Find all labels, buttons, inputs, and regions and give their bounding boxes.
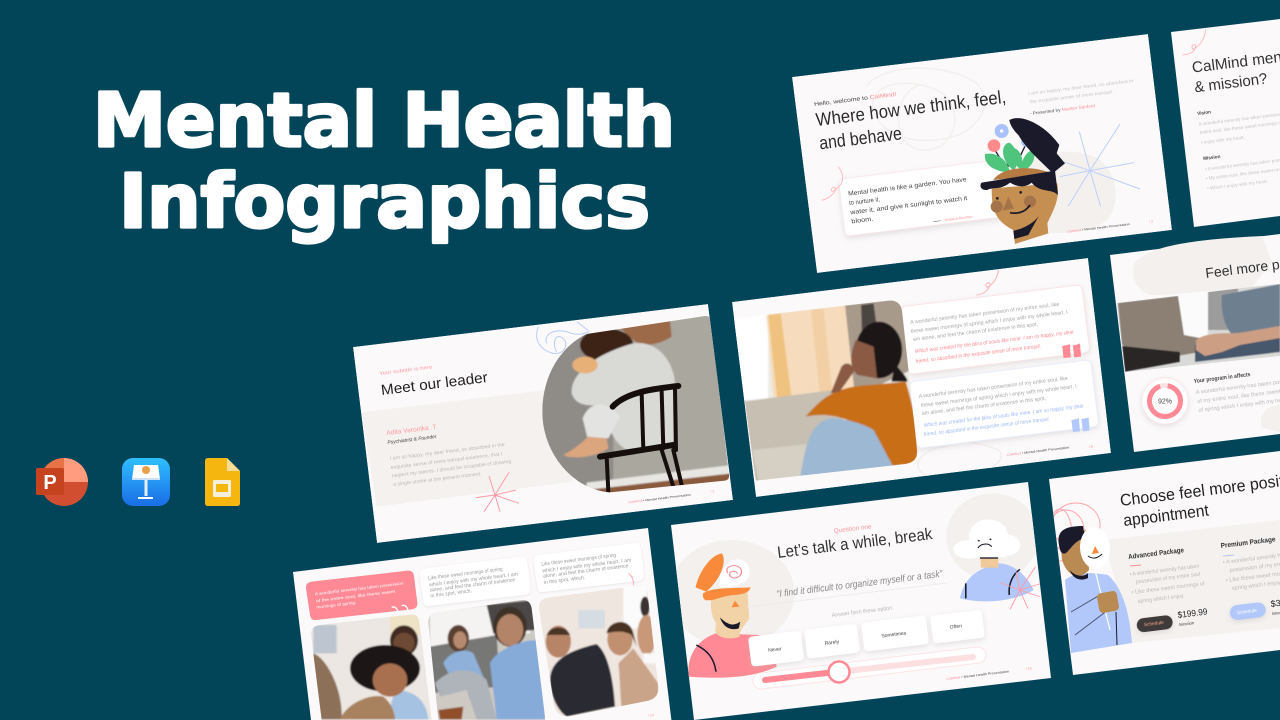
beige circle right — [946, 493, 1039, 580]
mission text — [1203, 154, 1280, 191]
bottom quote text: friend, so absorbed in the exquisite sense of mere tranquil. — [924, 417, 1050, 438]
bottom quote text: am alone, and feel the charm of existence in this spot, — [922, 396, 1047, 417]
pink star — [1000, 567, 1041, 609]
beige blob — [1133, 236, 1272, 295]
slide background — [1171, 19, 1280, 227]
decorative scribble — [867, 68, 985, 150]
leader bio: exquisite sense of mere tranquil existence, that I — [391, 451, 503, 471]
footer: CalMind • Mental Health Presentation — [1067, 222, 1130, 234]
icon: PowerPoint — [36, 458, 88, 506]
option: never: Never — [768, 646, 782, 654]
slide background — [293, 528, 671, 720]
icon: PowerPoint: P — [43, 472, 57, 494]
program heading: Your program in affects — [1194, 372, 1251, 385]
white card right — [533, 543, 644, 592]
white quote marks — [392, 605, 408, 613]
footer: CalMind • Mental Health Presentation — [628, 493, 691, 504]
vision text — [1197, 109, 1280, 145]
title: Infographics — [119, 159, 650, 245]
package: advanced: • Like these sweet mornings of — [1132, 581, 1205, 596]
slide: let's talk a while — [669, 482, 1051, 720]
quote card pink — [900, 285, 1090, 374]
photo: holding hands — [1110, 280, 1280, 380]
photo: embrace — [307, 610, 440, 720]
top quote text — [910, 302, 1074, 365]
donut chart — [1142, 378, 1188, 424]
footer: CalMind • Mental Health Presentation — [1007, 445, 1070, 457]
slide heading — [1119, 470, 1280, 530]
slide: meet our leader — [353, 304, 737, 543]
option: rarely — [804, 624, 860, 659]
quote: “I find it difficult to organize myself or a task” — [776, 569, 944, 600]
decorative scribble — [917, 442, 1002, 476]
welcome line: Hello, welcome to CalMind! — [814, 92, 897, 108]
flowers — [988, 124, 1031, 152]
slide heading — [815, 90, 1006, 150]
illustration: worried person — [688, 553, 777, 678]
slide art — [669, 493, 1041, 678]
slide background — [1110, 234, 1280, 452]
option: often — [930, 610, 985, 644]
slide contents — [306, 543, 663, 720]
pink card text — [315, 580, 405, 610]
program text — [1196, 377, 1280, 414]
slide background — [732, 258, 1111, 497]
slide: photo cards — [293, 528, 671, 720]
package: advanced: /session — [1179, 620, 1195, 627]
pink card text: A wonderful serenity has taken possession — [315, 580, 405, 596]
illustration: cloud person — [953, 519, 1034, 601]
slide heading: Meet our leader — [380, 370, 489, 399]
package: premium — [1220, 536, 1280, 621]
option prompt: Answer form these option: — [832, 605, 894, 619]
pink star — [476, 472, 519, 512]
pink curl — [976, 270, 999, 295]
pink curl — [822, 167, 843, 200]
top quote text: A wonderful serenity has taken possession of my entire soul, like — [910, 302, 1060, 326]
leaves — [985, 143, 1035, 173]
quote text — [848, 176, 968, 225]
vision text: I enjoy with my heart. — [1201, 135, 1245, 145]
icon: Keynote — [122, 458, 170, 506]
pink card text: of the entire soul, like these sweet — [316, 588, 397, 603]
package: advanced: Advanced Package — [1128, 547, 1184, 561]
package: premium: Premium Package — [1220, 536, 1276, 550]
option: sometimes: Sometimes — [881, 630, 907, 640]
quote text: bloom. — [851, 216, 874, 225]
slide subtitle: Your subtitle is here — [379, 364, 433, 377]
schedule button: Schedule — [1144, 620, 1164, 628]
blue star — [1060, 124, 1140, 207]
leader name: Adita Veronika .T — [386, 424, 437, 437]
top quote text: these sweet mornings of spring which I enjoy with my whole heart. I — [911, 310, 1068, 335]
illustration: head with flowers — [980, 118, 1065, 244]
quote card blue — [909, 360, 1099, 449]
option: sometimes — [861, 615, 929, 652]
thought bubble — [720, 559, 750, 587]
slide background — [792, 34, 1172, 273]
photo: seated person — [542, 316, 730, 492]
mission text: • Which I enjoy with my heart. — [1207, 179, 1268, 191]
leader bio: neglect my talents. I should be incapable of drawing — [392, 459, 512, 479]
slider — [761, 655, 978, 682]
beige band — [1104, 520, 1280, 643]
decorative shapes — [917, 270, 1002, 476]
intro text: I am so happy, my dear friend, so absorbed in — [1028, 78, 1134, 96]
page number: / 16 — [1026, 666, 1032, 671]
intro text — [1028, 78, 1134, 116]
slide: feel more positive — [1110, 234, 1280, 452]
beige blob — [1020, 152, 1116, 233]
bottom quote text — [919, 376, 1084, 438]
slide background — [1049, 451, 1280, 675]
package: advanced: possession of my entire soul — [1136, 572, 1201, 585]
slide heading: appointment — [1122, 502, 1210, 530]
slide shapes — [669, 493, 1041, 678]
right card text: alone, and feel the charm of existence — [543, 563, 629, 580]
page number: / 3 — [1149, 219, 1153, 224]
quote mark blue — [1071, 417, 1090, 432]
photo: two women — [427, 598, 547, 720]
pink rings — [1048, 503, 1100, 561]
intro text: - Presented by Marilyn Sanford — [1030, 103, 1096, 116]
donut value: 92% — [1158, 398, 1172, 406]
slide: choose appointment — [1048, 451, 1280, 675]
title — [93, 78, 675, 245]
footer: CalMind • Mental Health Presentation — [946, 669, 1010, 681]
package: advanced — [1128, 547, 1208, 633]
slide art — [1048, 503, 1280, 653]
slide background — [671, 482, 1051, 720]
photo: woman on sofa — [727, 297, 927, 487]
middle card text: in this spot, which. — [430, 588, 472, 599]
pink curl — [629, 573, 633, 585]
mission text: Mission — [1203, 154, 1221, 161]
beige band — [362, 390, 573, 507]
slide: pensive woman with quotes — [727, 258, 1111, 497]
slide contents — [814, 68, 1153, 244]
leader role: Psychiatrist & Founder — [387, 434, 437, 446]
slide heading — [1191, 41, 1280, 96]
right card text: which I enjoy with my whole heart. I am — [542, 557, 632, 574]
quote author: Ardana Buchan — [945, 215, 973, 222]
quote mark pink — [1062, 343, 1081, 358]
quote text: water it, and give it sunlight to watch it — [849, 195, 968, 216]
leader bio: I am so happy, my dear friend, so absorbed in the — [390, 442, 505, 462]
top quote text: Which was created for the bliss of souls like mine. I am so happy, my dear — [915, 330, 1074, 355]
pink card — [306, 571, 417, 620]
slide: where how we think — [792, 34, 1172, 273]
bottom quote text: A wonderful serenity has taken possession of my entire soul, like — [919, 376, 1068, 400]
right card text: Like these sweet mornings of spring — [541, 553, 616, 568]
slide heading: Let’s talk a while, break — [776, 525, 934, 562]
quote text: Mental health is like a garden. You have — [848, 176, 968, 198]
slide contents — [362, 310, 737, 512]
slide heading: Where how we think, feel, — [815, 86, 1007, 130]
slide shapes — [727, 297, 1090, 487]
leader bio: a single stroke at the present moment. — [393, 471, 482, 488]
beige circle left — [669, 540, 794, 647]
option: never — [748, 631, 804, 667]
illustration: man with mask — [1058, 526, 1132, 653]
page number: / 8 — [1089, 445, 1093, 449]
subtitle: Question one — [833, 523, 872, 535]
vision text: Vision — [1197, 109, 1211, 116]
slide heading: & mission? — [1193, 70, 1268, 96]
right card text — [541, 553, 632, 586]
title: Mental Health — [93, 78, 675, 164]
package: advanced: spring which I enjoy. — [1138, 593, 1185, 605]
page number: / 10 — [648, 713, 654, 718]
slide contents — [1182, 29, 1280, 191]
quote text: to nurture it, — [849, 196, 881, 207]
quote card — [838, 159, 1011, 236]
middle card text: alone, and feel the charm of existence — [430, 577, 516, 594]
beige blob bottom — [1261, 405, 1280, 432]
schedule button: Schedule — [1237, 608, 1257, 616]
white card middle — [419, 557, 531, 606]
pink curl — [1182, 29, 1206, 55]
top quote text: friend, so absorbed in the exquisite sense of mere tranquil. — [916, 344, 1041, 365]
icon: Google Slides — [205, 458, 240, 506]
middle card text — [428, 567, 518, 599]
slide heading: and behave — [818, 122, 903, 153]
package: advanced: • A wonderful serenity has taken — [1130, 563, 1200, 578]
page number: / 3 — [710, 489, 715, 494]
slide background — [353, 304, 733, 543]
blue squiggle — [537, 322, 589, 353]
middle card text: which I enjoy with my whole heart. I am — [429, 571, 518, 588]
bottom quote text: Which was created for the bliss of souls like mine. I am so happy, my dear — [924, 403, 1084, 429]
option: rarely: Rarely — [824, 639, 840, 647]
price: $199.99 — [1177, 606, 1208, 620]
intro text: the exquisite sense of mere tranquil. — [1030, 89, 1113, 104]
cloud — [953, 519, 1020, 559]
right card text: in this spot, which. — [544, 575, 586, 586]
slide: calmind mission — [1171, 19, 1280, 227]
pink card text: mornings of spring. — [316, 600, 356, 610]
photo: group portrait — [537, 583, 663, 720]
middle card text: Like these sweet mornings of spring — [428, 567, 503, 582]
bottom quote text: these sweet mornings of spring which I enjoy with my whole heart. I — [921, 384, 1077, 409]
leader bio — [390, 442, 512, 488]
top quote text: am alone, and feel the charm of existence in this spot, — [913, 322, 1039, 343]
option: often: Often — [949, 623, 963, 631]
